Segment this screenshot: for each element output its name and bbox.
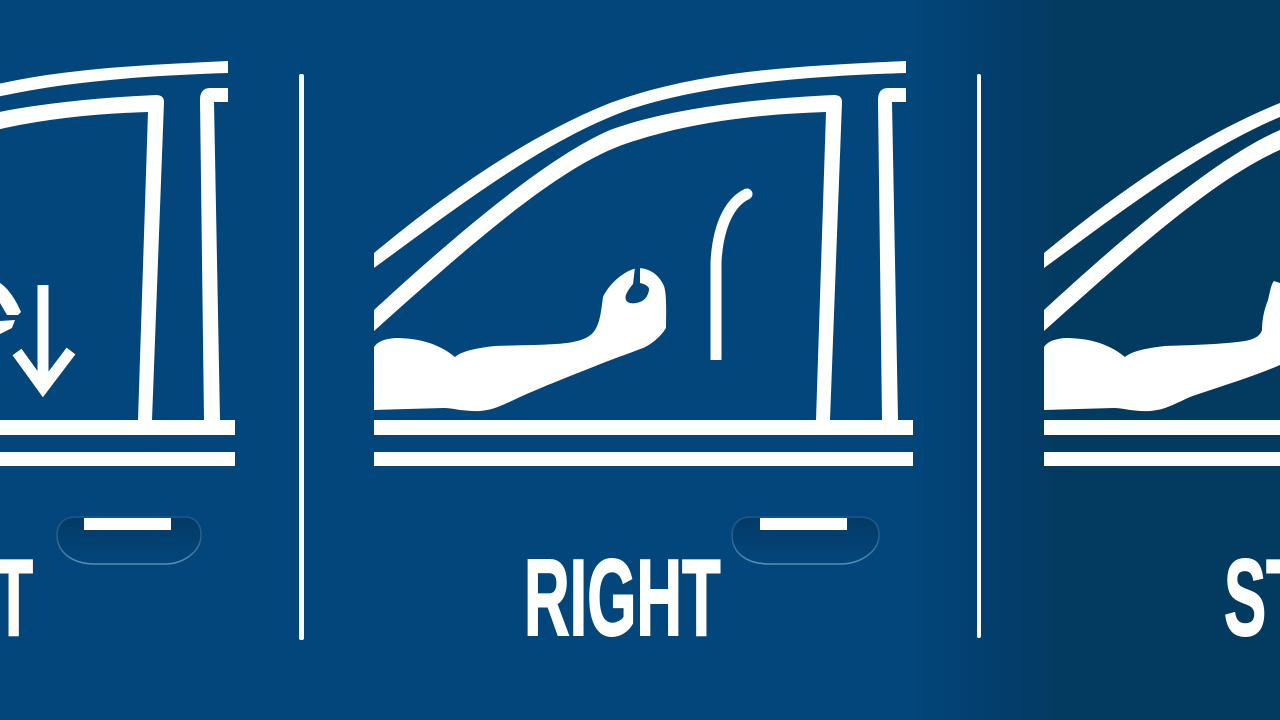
divider: right bbox=[977, 74, 981, 638]
panel: left signal bbox=[0, 61, 235, 658]
door handle bar: left panel bbox=[84, 518, 171, 530]
car door outline: left panel bbox=[0, 61, 235, 466]
icon: bent arm bbox=[374, 267, 666, 411]
car door outline: right panel bbox=[1044, 61, 1280, 466]
panel: stop signal bbox=[1044, 61, 1280, 658]
icon: raised arm bbox=[1044, 281, 1280, 411]
icon: down arrow bbox=[17, 285, 71, 388]
label: right: RIGHT bbox=[524, 536, 721, 658]
panel: right signal bbox=[374, 61, 913, 658]
door handle: left panel bbox=[57, 517, 201, 564]
door handle: centre panel bbox=[732, 517, 879, 564]
icon: wing mirror curve bbox=[716, 188, 752, 360]
icon: rotating hand fragment bbox=[0, 283, 21, 334]
divider: left bbox=[299, 74, 304, 640]
car door outline: centre panel bbox=[374, 61, 913, 466]
door handle bar: centre panel bbox=[760, 518, 847, 530]
